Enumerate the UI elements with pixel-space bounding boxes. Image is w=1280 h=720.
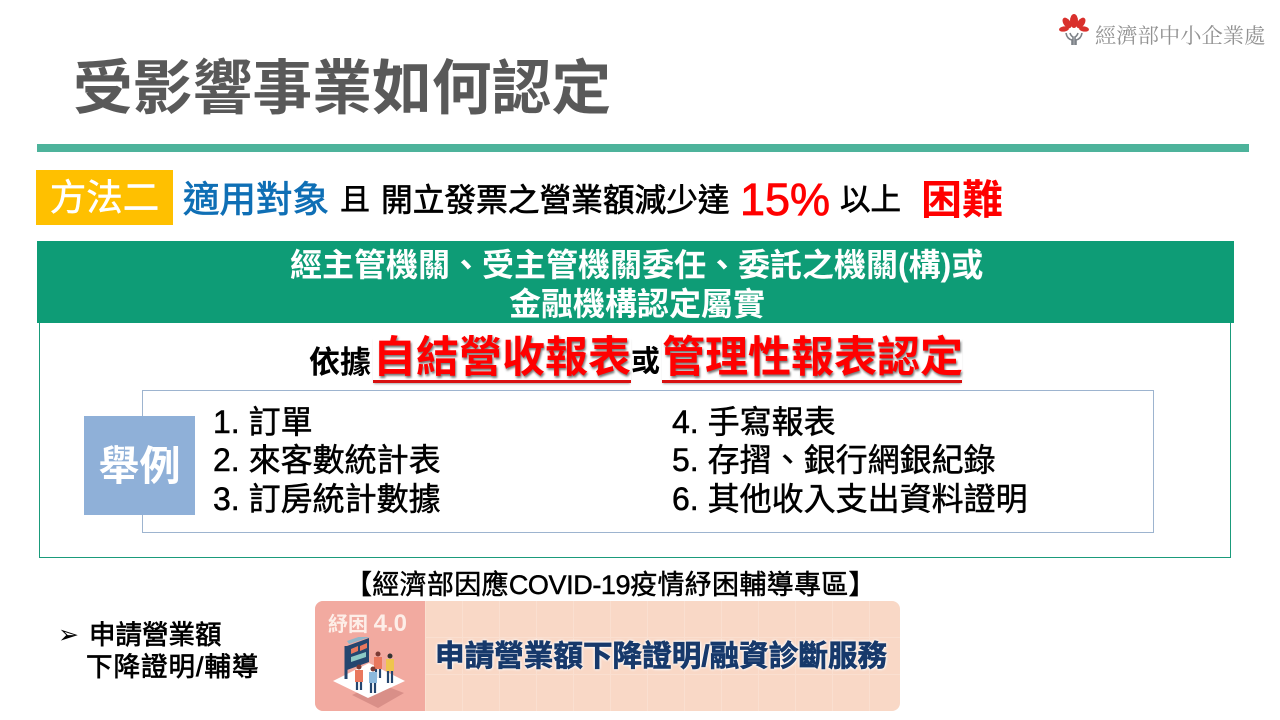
examples label xyxy=(84,416,195,515)
condition text: 開立發票之營業額減少達 xyxy=(381,182,730,218)
banner heading: 申請營業額下降證明/融資診斷服務 xyxy=(435,640,887,673)
subtitle row xyxy=(183,174,1003,225)
panel header xyxy=(37,241,1234,323)
logo text: 經濟部中小企業處 xyxy=(1095,19,1265,50)
item 1: 1. 訂單 xyxy=(213,404,313,440)
panel: recognition xyxy=(39,300,1231,558)
basis heading xyxy=(309,334,964,386)
banner label: 紓困 4.0 xyxy=(328,610,407,637)
above: 以上 xyxy=(840,183,901,217)
bullet arrow: ➢ xyxy=(58,620,79,649)
title rule xyxy=(37,144,1249,152)
bullet line 1: 申請營業額 xyxy=(89,620,222,650)
list left xyxy=(213,404,441,517)
condition and: 且 xyxy=(340,184,370,217)
item 3: 3. 訂房統計數據 xyxy=(213,481,441,517)
logo: 經濟部中小企業處 xyxy=(1059,14,1265,50)
badge: 方法二 xyxy=(36,170,173,225)
item 4: 4. 手寫報表 xyxy=(672,404,836,440)
list right xyxy=(672,404,1028,517)
item 5: 5. 存摺、銀行網銀紀錄 xyxy=(672,442,996,478)
report type one: 自結營收報表 xyxy=(373,334,631,382)
icon: people at kiosk xyxy=(333,637,405,708)
banner xyxy=(315,601,900,711)
bullet line 2: 下降證明/輔導 xyxy=(86,652,259,682)
title: 受影響事業如何認定 xyxy=(73,55,611,122)
or: 或 xyxy=(631,346,660,378)
basis prefix: 依據 xyxy=(309,345,371,380)
examples label: 舉例 xyxy=(98,443,180,489)
banner left block xyxy=(315,601,425,711)
header line 1: 經主管機關、受主管機關委任、委託之機關(構)或 xyxy=(290,247,983,283)
examples box xyxy=(142,390,1154,533)
applicable target: 適用對象 xyxy=(183,179,329,220)
bullet: apply for proof xyxy=(58,620,259,682)
header line 2: 金融機構認定屬實 xyxy=(509,286,765,322)
difficulty: 困難 xyxy=(921,177,1003,223)
icon: red flower emblem xyxy=(1059,14,1089,45)
badge: 方法二: 方法二 xyxy=(50,177,159,218)
zone caption: 【經濟部因應COVID-19疫情紓困輔導專區】 xyxy=(345,570,876,600)
item 2: 2. 來客數統計表 xyxy=(213,442,441,478)
report type two: 管理性報表認定 xyxy=(662,334,963,382)
15 percent: 15% xyxy=(740,174,830,225)
item 6: 6. 其他收入支出資料證明 xyxy=(672,481,1028,517)
